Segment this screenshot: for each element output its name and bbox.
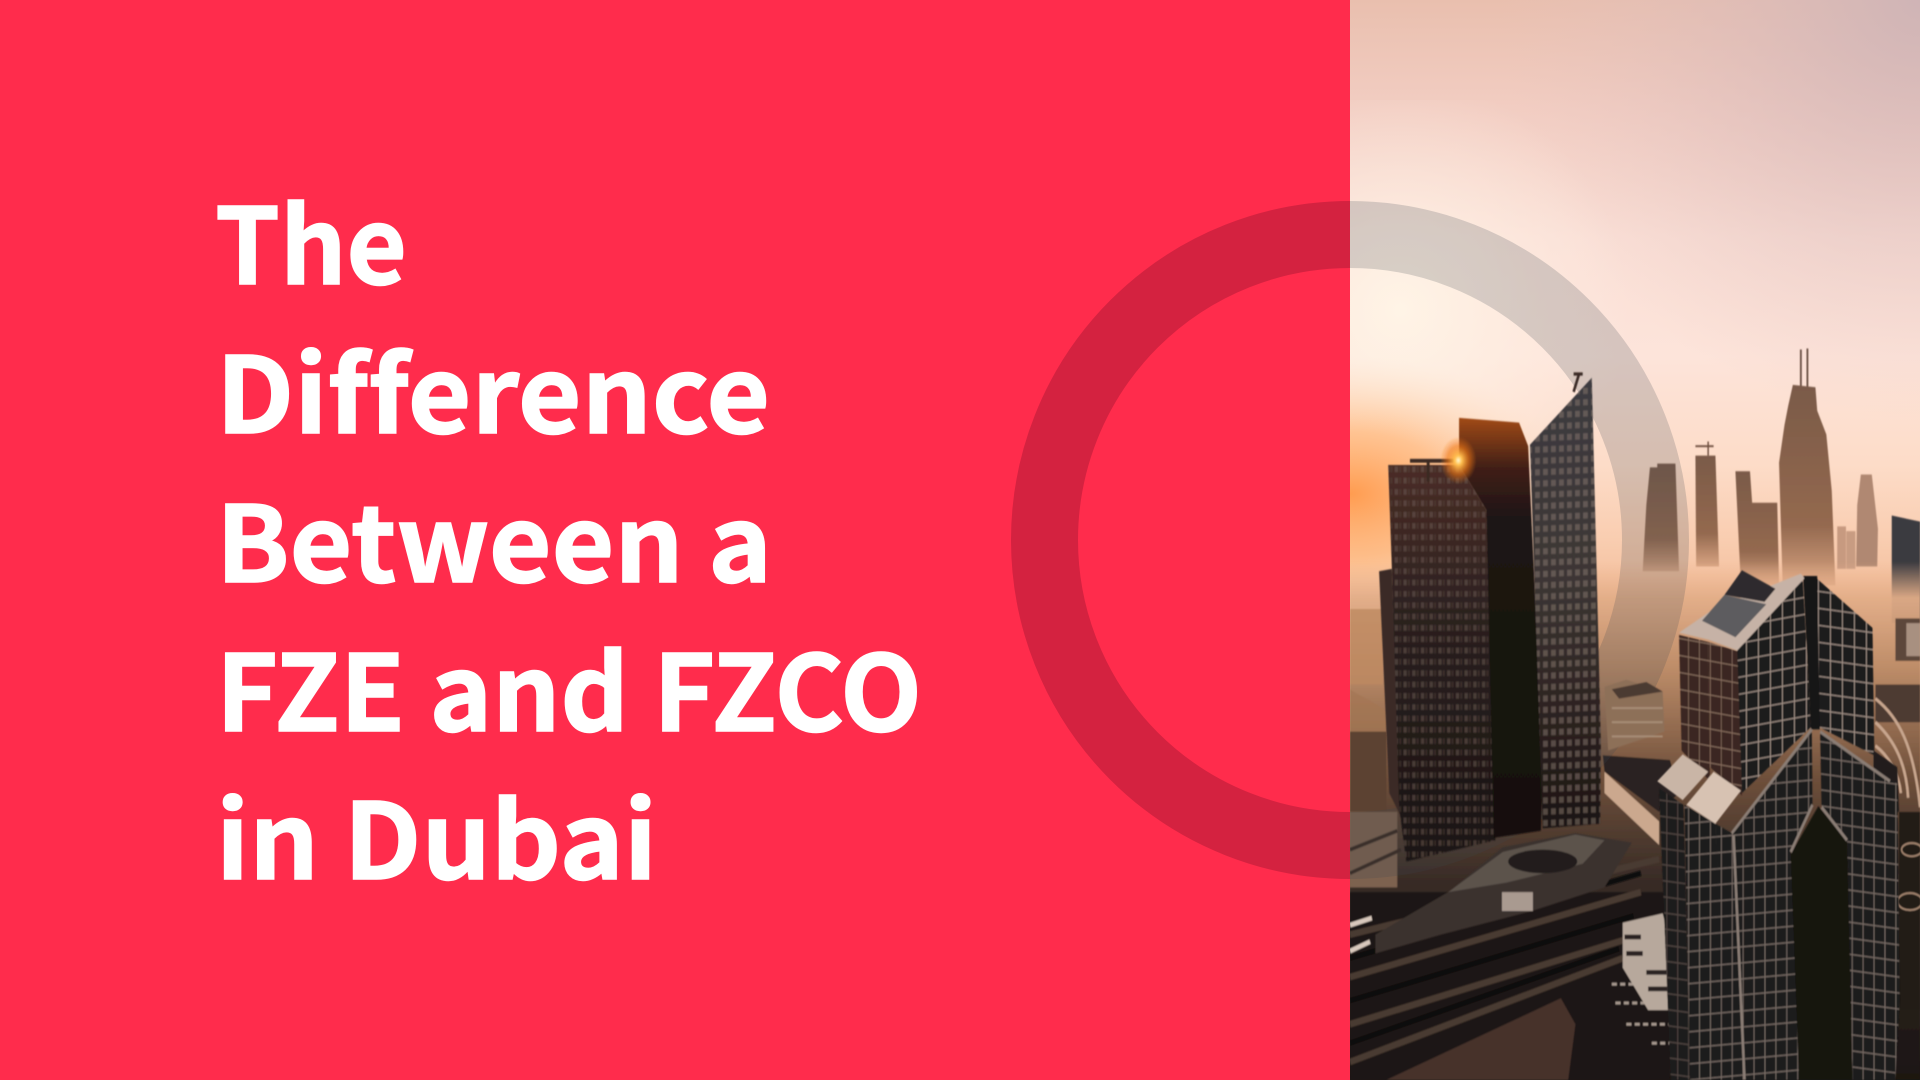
ground haze and streets [1350, 562, 1920, 1080]
title line 5: in Dubai [216, 758, 657, 910]
road network [1350, 859, 1670, 1080]
lower right building [1657, 729, 1900, 1080]
title line 1: The [215, 163, 407, 315]
low-rise building [1605, 680, 1665, 751]
left tower group [1379, 374, 1601, 861]
white low building [1623, 913, 1669, 1010]
title line 3: Between a [216, 461, 772, 613]
title line 4: FZE and FZCO [216, 610, 922, 762]
distant skyline [1643, 348, 1920, 623]
ring: left half on red panel [1044, 234, 1350, 846]
title line 2: Difference [216, 312, 770, 464]
title [215, 163, 922, 910]
upper right building [1679, 570, 1899, 812]
foreground skyscrapers and streets [1350, 374, 1900, 1080]
podium dome [1375, 833, 1632, 953]
sky [1350, 0, 1920, 1080]
panel: red background [0, 0, 1350, 1080]
panel: Dubai skyline photo [1350, 0, 1920, 1080]
ring: right half on photo [1350, 234, 1656, 846]
